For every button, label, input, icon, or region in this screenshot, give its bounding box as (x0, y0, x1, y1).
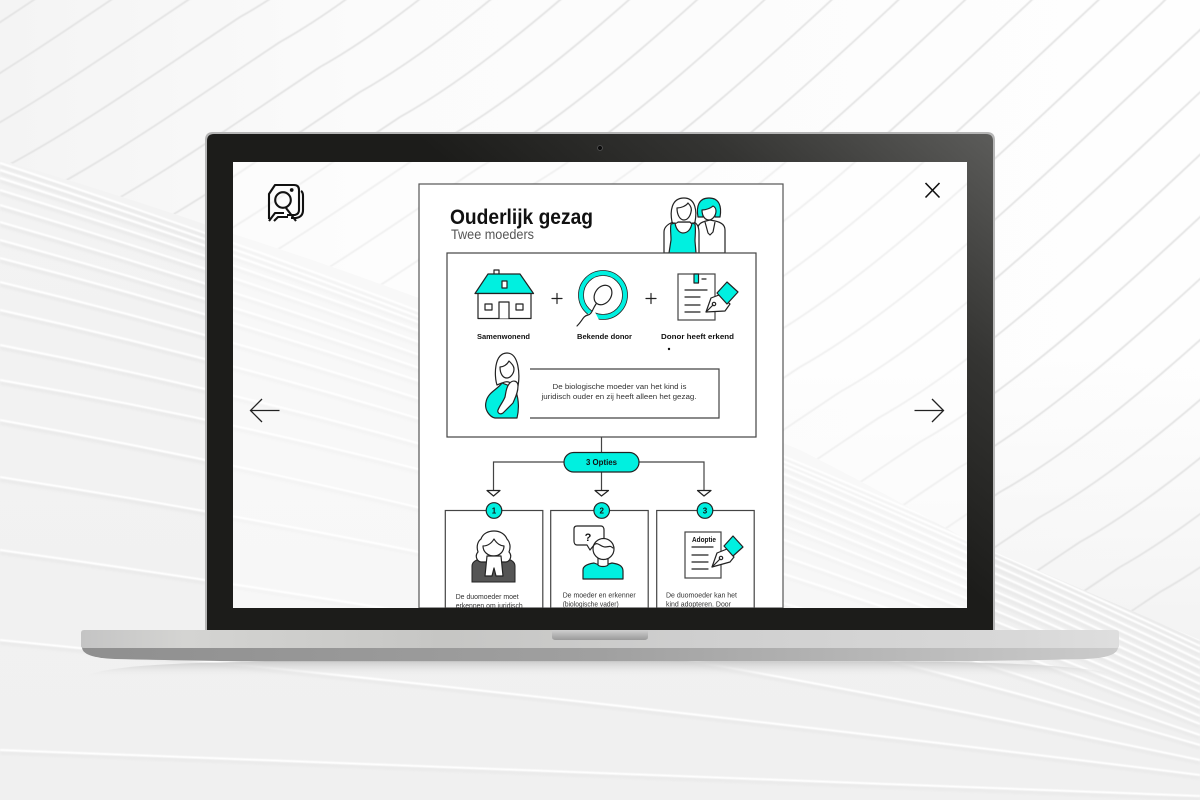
plus sign (646, 294, 656, 304)
number badge 1: 1 (492, 506, 497, 515)
next arrow (914, 399, 944, 422)
text: option 3: kind adopteren. Door (666, 600, 731, 608)
text: option 1 (456, 594, 522, 608)
poster and its content, cropped by the screen (419, 184, 783, 610)
icon: judge (472, 531, 515, 582)
flow connectors (487, 437, 711, 496)
text: option 3 (666, 592, 737, 608)
number badge 2 (594, 503, 610, 518)
card 1: court recognition (445, 510, 543, 610)
panel: situation box (447, 253, 756, 437)
text: option 2: (biologische vader) (563, 600, 619, 608)
subheading: Twee moeders: Twee moeders (451, 227, 534, 242)
laptop: base deck (81, 630, 1119, 648)
label: Bekende donor: Bekende donor (577, 332, 632, 341)
icon: house (475, 270, 534, 318)
laptop: screen glass (233, 162, 967, 608)
arrowhead 2 (595, 490, 608, 496)
close icon (926, 183, 940, 198)
text: option 1: De duomoeder moet (456, 592, 520, 601)
text: option 2 (563, 592, 636, 608)
icon: known donor sperm cell (576, 270, 628, 327)
text: option 3: De duomoeder kan het (666, 591, 738, 600)
heading: Ouderlijk gezag: Ouderlijk gezag (450, 206, 593, 229)
laptop: silver lid edge (205, 132, 995, 630)
icon: adoption document: Adoptie (692, 537, 716, 544)
laptop: webcam (598, 146, 602, 150)
pill: 3 Opties: 3 Opties (586, 458, 618, 467)
laptop: hinge notch (552, 630, 648, 640)
number badge 3 (697, 503, 713, 518)
stray dot (668, 348, 670, 350)
illustration: two mothers (664, 198, 725, 253)
callout: legal statement: juridisch ouder en zij heeft alleen het gezag. (540, 392, 696, 401)
label: Samenwonend: Samenwonend (477, 332, 530, 341)
label: Donor heeft erkend: Donor heeft erkend (661, 332, 734, 341)
card 3: adoption (657, 510, 754, 608)
previous arrow (250, 399, 280, 422)
callout: legal statement (530, 369, 719, 418)
number badge 2: 2 (599, 506, 604, 515)
pill: 3 Opties (564, 452, 639, 472)
laptop: black bezel (207, 134, 993, 630)
icon: pregnant mother (486, 353, 519, 418)
icon: signed document (678, 274, 738, 320)
arrowhead 3 (698, 490, 711, 496)
card 2: recognition by biological father (551, 510, 648, 608)
icon: person with question: ? (585, 532, 592, 544)
number badge 3: 3 (703, 506, 708, 515)
laptop: underside of base (82, 647, 1118, 662)
number badge 1 (486, 503, 502, 518)
laptop: reflection on the floor (84, 662, 1117, 677)
text: option 1: erkennen om juridisch (456, 601, 523, 610)
plus sign (552, 294, 562, 304)
logo: speech bubble with magnifier (269, 185, 303, 221)
text: option 2: De moeder en erkenner (563, 591, 636, 600)
callout: legal statement: De biologische moeder van het kind is (552, 382, 687, 391)
arrowhead 1 (487, 490, 500, 496)
